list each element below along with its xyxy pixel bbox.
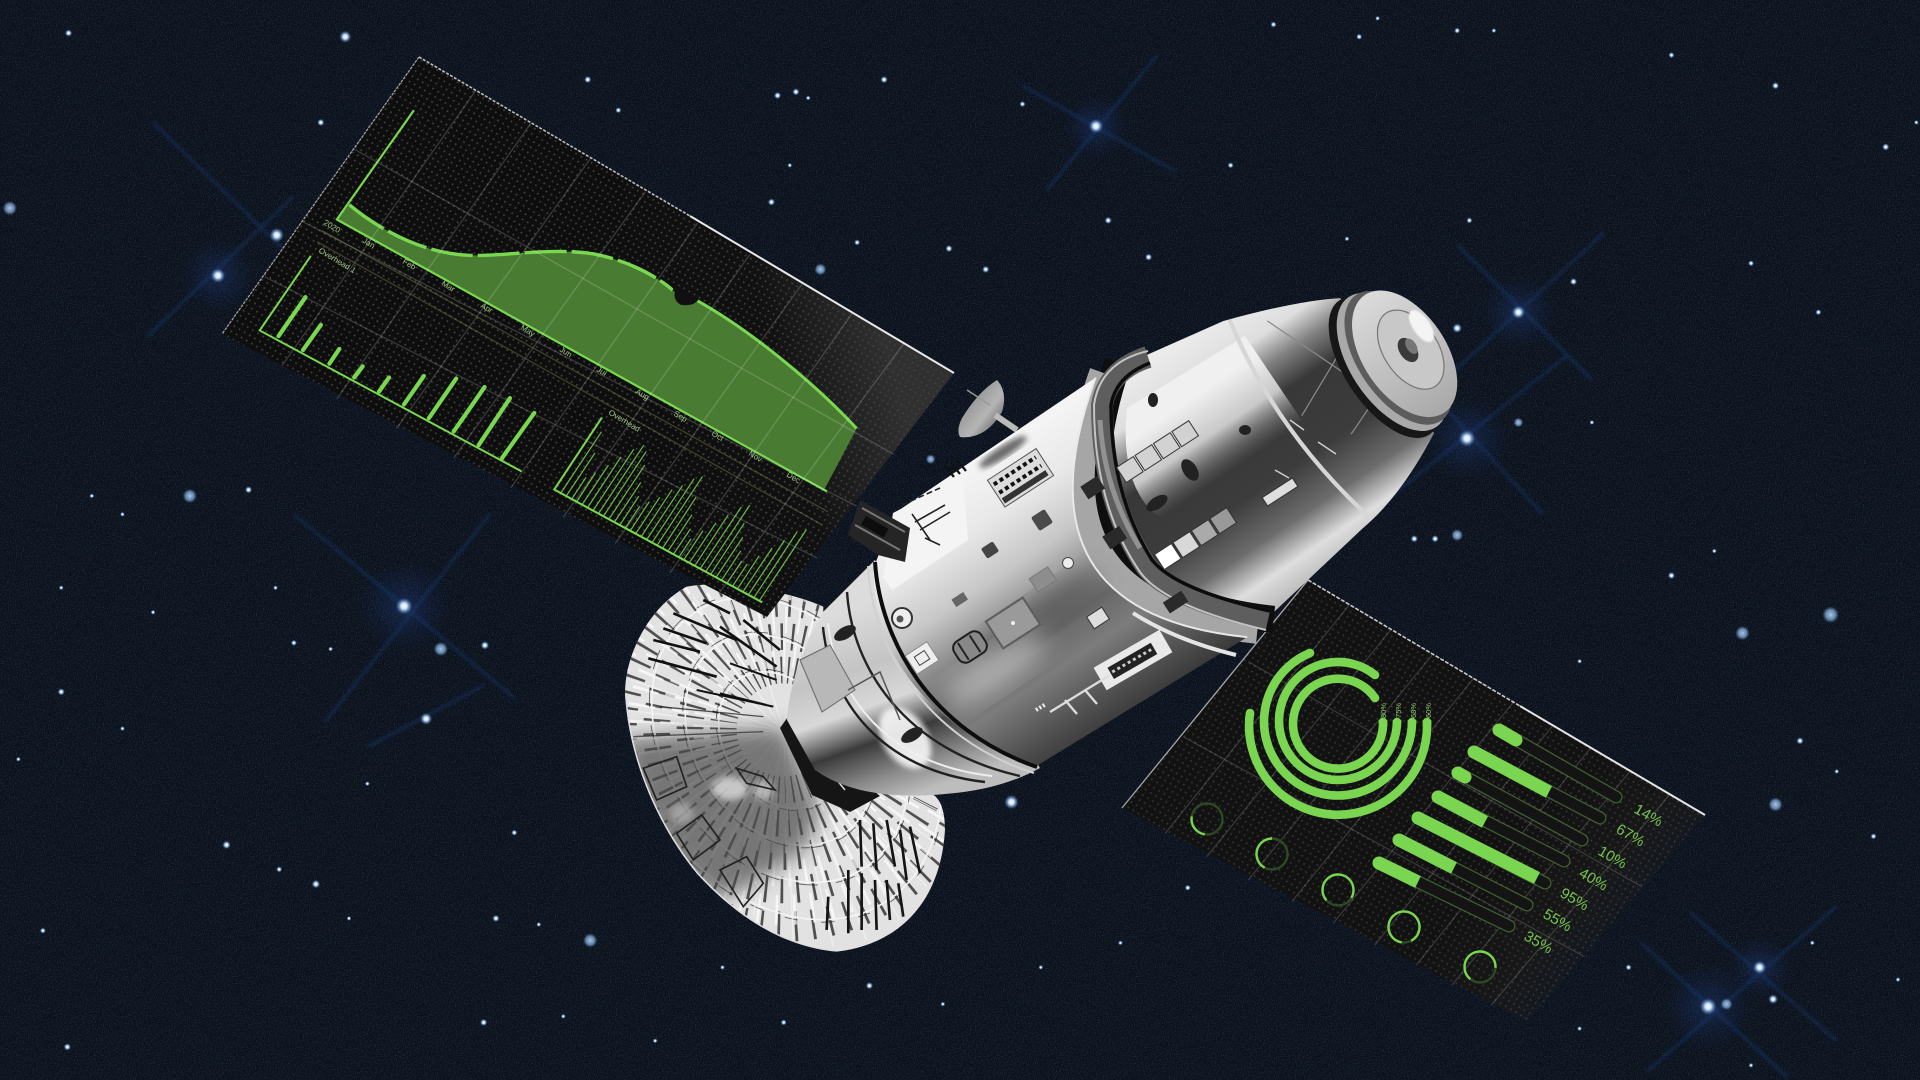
progress bar tracks [1379,730,1616,926]
chart axis labels: May [519,323,537,339]
nose hub [1393,334,1423,366]
dish concentric ribs [648,598,942,923]
small ring gauges [1189,801,1502,989]
forward frame [1094,351,1270,630]
chart axis labels: Sep [672,409,689,424]
dish upper black struts [633,600,780,737]
chart axis labels: Jul [595,365,609,378]
progress bars [1372,730,1549,882]
lower white ring [1133,613,1236,655]
panel grid lines [1165,605,1669,1005]
progress percentage labels: 35% [1521,928,1556,957]
silver ring at cylinder front [1017,373,1271,680]
radial chart: four concentric arcs [1249,653,1431,815]
nose face [1330,272,1479,436]
cylinder front edge [1007,378,1263,686]
radial chart labels: 80% [1379,703,1388,718]
chart axis labels: Jun [558,345,574,359]
progress percentage labels: 10% [1595,843,1630,872]
area chart [337,110,857,491]
capsule fitting [950,628,990,666]
tile row upper [1117,421,1198,483]
dish highlights [670,777,773,823]
dish radial ribs [627,590,943,947]
chart axis labels: Aug [634,387,651,402]
rear section [787,560,1040,796]
satellite parabolic dish [625,584,945,952]
chart axis labels [317,218,802,485]
radial chart labels [1379,703,1433,718]
white equipment plate [883,477,968,590]
data plate [986,598,1040,648]
radial chart labels: 68% [1409,703,1418,718]
progress percentage labels: 55% [1540,906,1575,935]
small white plate [905,642,939,674]
progress percentage labels: 40% [1576,865,1611,894]
chart axis labels: Mar [440,279,457,294]
chart axis labels: Oct [710,429,726,444]
hull vent patches [1080,476,1188,613]
main cylinder [828,378,1263,807]
radial chart labels: 75% [1394,703,1403,718]
progress percentage labels: 14% [1631,801,1666,830]
instrument panel [988,449,1054,507]
hull fittings [951,509,1109,629]
neck with dark truss [780,700,880,812]
plate wiring detail [902,488,950,545]
dish shaded sector [620,727,820,900]
bar chart: overhead monthly [260,256,534,471]
camera unit [848,500,910,562]
chart axis labels: Jan [361,236,377,250]
satellite body [780,204,1521,812]
front hull fittings [1144,393,1251,515]
small antenna dish [958,380,1017,437]
bar chart: overhead daily [554,417,806,602]
chart axis labels: 2020 [322,218,342,235]
tile row lower [1155,508,1236,570]
panel grid lines [265,90,904,599]
front section [996,238,1471,693]
panel background [1122,580,1705,1022]
chart axis labels: Apr [479,301,495,315]
progress percentage labels: 67% [1613,821,1648,850]
panel background [222,57,954,617]
chart axis labels: Overhead 1 [317,246,358,276]
radial chart labels: 60% [1424,703,1433,718]
main cylinder rear edge [868,562,1037,773]
progress percentage labels: 95% [1557,885,1592,914]
dark gap behind frame [1034,362,1286,668]
antenna shadow [976,432,1030,472]
chart axis labels: Nov [747,449,764,464]
lower nose rack [1262,478,1298,506]
round port [892,608,912,628]
dish radial dash texture [625,584,945,942]
nose ring [1307,279,1462,456]
chart axis labels: Overhead [607,408,642,434]
panel: radial and progress charts [1122,580,1705,1022]
progress percentage labels [1521,801,1666,957]
chart axis labels: Feb [401,257,418,272]
grill [945,460,966,477]
dish lower black struts [827,820,920,933]
nose panel ticks [1275,420,1336,478]
panel: line and bar charts [222,57,954,617]
truss [1036,675,1110,714]
chart axis labels: Dec [785,470,802,485]
dish panel outlines [643,757,775,907]
lower equipment rack [1094,630,1172,690]
